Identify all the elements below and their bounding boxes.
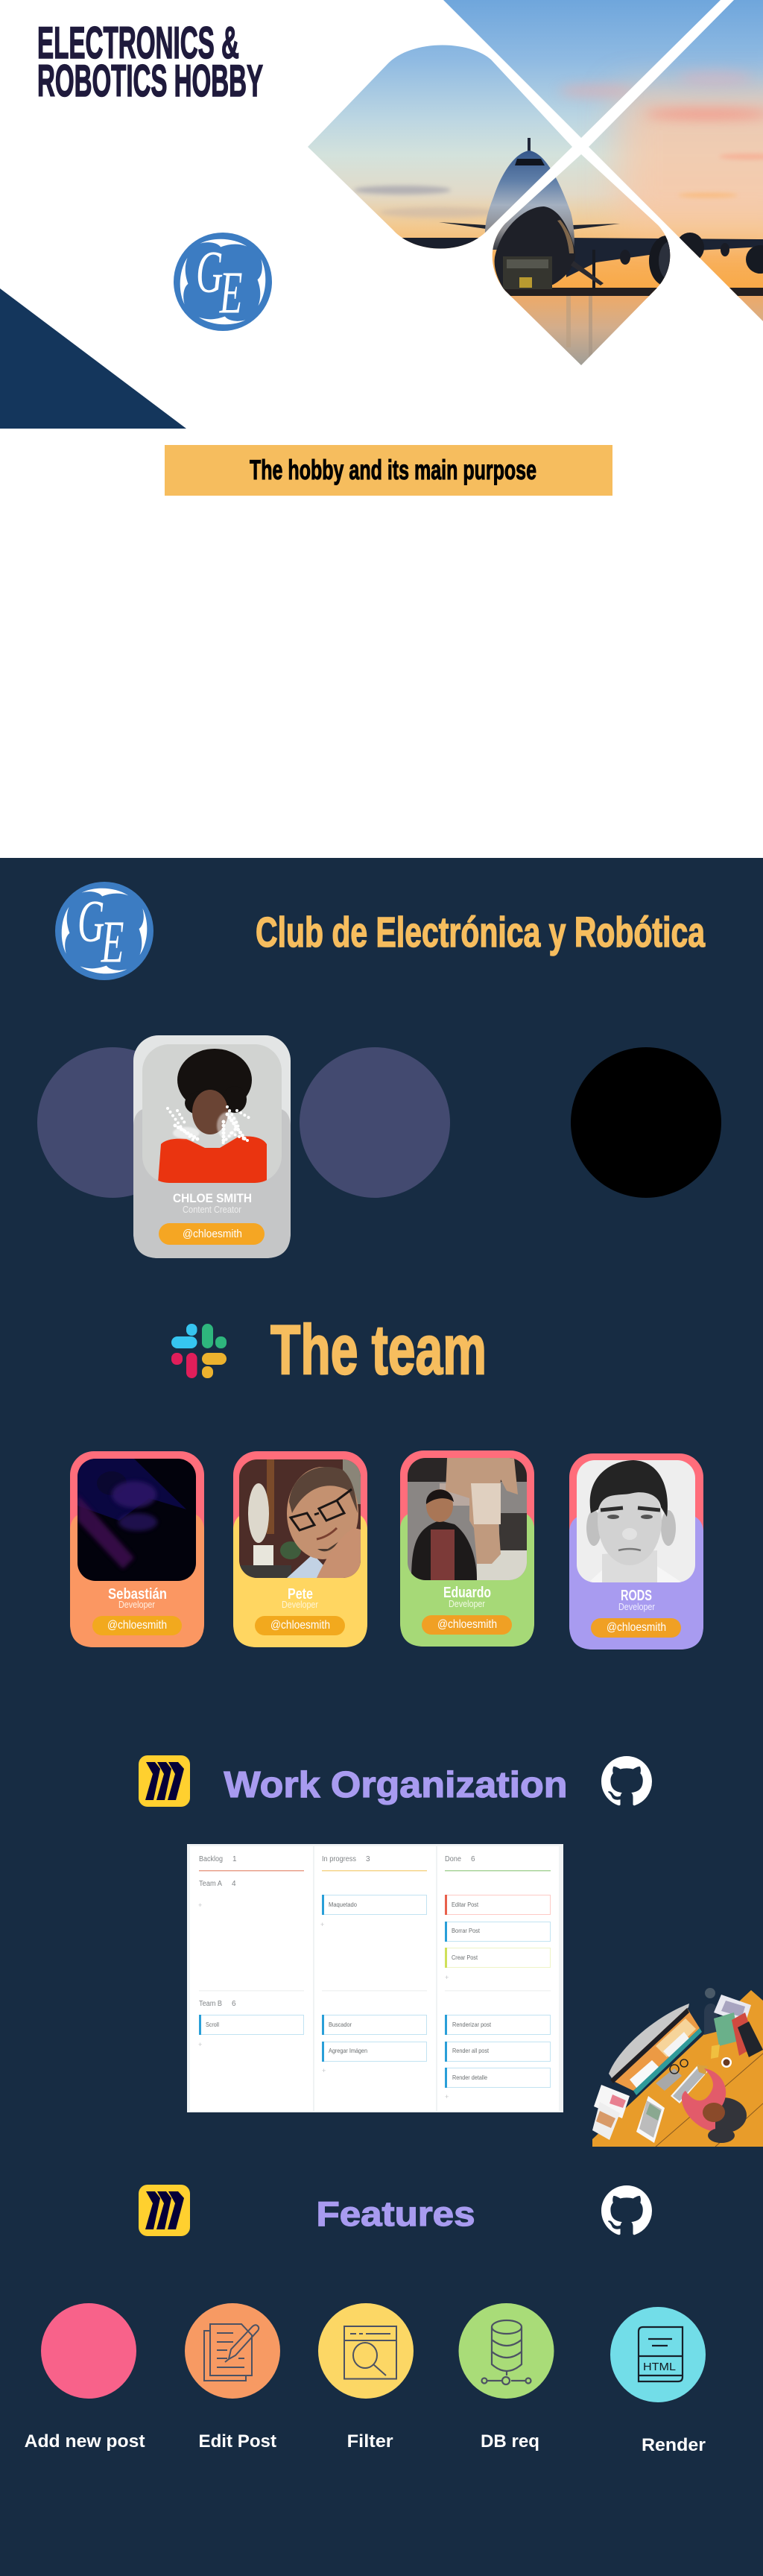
add markers: + [198, 1901, 202, 1909]
icon: github [601, 1756, 652, 1805]
name: RODS [621, 1588, 652, 1604]
heading: Features [316, 2194, 475, 2233]
task: Render all post: Render all post [452, 2047, 490, 2054]
tailplanes [439, 222, 620, 230]
notebook [636, 2096, 665, 2143]
handle pill: @chloesmith [437, 1618, 497, 1631]
team heading: The team [270, 1310, 487, 1389]
truck and landing gear [503, 256, 552, 289]
task cards [199, 1895, 550, 2088]
handle pill: @chloesmith [183, 1228, 242, 1240]
card: Eduardo [400, 1450, 534, 1647]
card: Pete [233, 1451, 367, 1647]
papers [592, 2085, 630, 2140]
handle pill: @chloesmith [607, 1621, 666, 1634]
column headers: In progress [322, 1855, 356, 1863]
circle middle [300, 1047, 450, 1198]
hero title: ELECTRONICS & [37, 18, 239, 68]
role: Developer [618, 1601, 656, 1612]
engines [649, 236, 671, 285]
feature: add new post [25, 2303, 145, 2452]
add markers: + [320, 1921, 324, 1928]
add markers [198, 1901, 449, 2100]
tail fin [528, 138, 531, 151]
heading: Work Organization [224, 1765, 568, 1805]
statue [446, 1458, 518, 1564]
horizon [484, 288, 763, 296]
column headers: Backlog [199, 1855, 223, 1863]
task: Agregar Imágen: Agregar Imágen [329, 2047, 367, 2054]
photo: RODS [577, 1460, 695, 1582]
subtitle banner: The hobby and its main purpose [250, 455, 536, 485]
man [411, 1521, 477, 1580]
column headers [199, 1855, 475, 2008]
feature: edit post: Edit Post [198, 2431, 276, 2452]
lamp [704, 1988, 719, 2035]
task: Editar Post [445, 1895, 550, 1915]
ge logo hero [174, 233, 272, 331]
panel: the team [70, 1310, 703, 1650]
column headers: 6 [471, 1855, 475, 1863]
task: Render all post [445, 2042, 550, 2062]
task: Crear Post: Crear Post [452, 1954, 478, 1961]
glasses [291, 1489, 352, 1530]
icon: html book: HTML [643, 2361, 676, 2373]
circle left [37, 1047, 188, 1198]
task: Maquetado [322, 1895, 426, 1915]
column headers: 4 [232, 1880, 236, 1888]
task: Crear Post [445, 1948, 550, 1968]
icon: search window [344, 2326, 396, 2379]
navy corner triangle [0, 288, 186, 429]
icon: miro [139, 2185, 190, 2236]
add markers: + [445, 2093, 449, 2100]
panel: hero [0, 0, 763, 496]
hero airplane photo collage [298, 0, 763, 370]
mug [721, 2057, 732, 2068]
role: Developer [449, 1598, 486, 1609]
task: Buscador [322, 2015, 426, 2035]
panel: features [25, 2185, 706, 2455]
panel: circles and featured card [37, 1035, 721, 1258]
task: Buscador: Buscador [329, 2021, 352, 2028]
name: CHLOE SMITH [173, 1191, 252, 1205]
column headers: 3 [366, 1855, 370, 1863]
photo: Pete [239, 1459, 361, 1578]
hero title [37, 18, 263, 106]
handle pill [255, 1616, 345, 1635]
ge logo hero: E [219, 259, 242, 326]
photo: Sebastián [77, 1459, 196, 1581]
handle pill [591, 1618, 681, 1638]
fuselage [485, 151, 574, 250]
hero title: ROBOTICS HOBBY [37, 56, 263, 106]
ge logo hero: G [196, 239, 223, 306]
panel: club header [55, 882, 706, 980]
feature: add new post: Add new post [25, 2431, 145, 2452]
task: Editar Post: Editar Post [452, 1901, 479, 1908]
role: Developer [282, 1599, 319, 1610]
task: Renderizar post [445, 2015, 550, 2035]
phone [711, 2045, 720, 2059]
navy background panel [0, 858, 763, 2576]
icon: database [481, 2320, 531, 2384]
card: RODS [569, 1453, 703, 1650]
illustration: desk top view [592, 1988, 763, 2147]
keyboard [671, 2065, 708, 2103]
panel: work organization [139, 1755, 763, 2147]
card: Chloe Smith [133, 1035, 291, 1258]
add markers: + [322, 2067, 326, 2074]
wings [402, 238, 478, 249]
name: Sebastián [108, 1586, 167, 1603]
task: Renderizar post: Renderizar post [452, 2021, 492, 2028]
task: Borrar Post: Borrar Post [452, 1927, 481, 1934]
feature: render [610, 2307, 706, 2455]
monitor [609, 2004, 702, 2095]
name: Pete [288, 1586, 313, 1603]
handle pill [422, 1615, 512, 1635]
person [682, 2068, 747, 2143]
feature: filter [318, 2303, 414, 2452]
water reflection [510, 295, 763, 365]
name: Eduardo [443, 1585, 491, 1601]
task: Agregar Imágen [322, 2042, 426, 2062]
handle pill: @chloesmith [270, 1619, 330, 1632]
column headers: Team B [199, 2000, 222, 2008]
ge logo club [55, 882, 153, 980]
photo: Eduardo [408, 1458, 527, 1580]
dark nose [495, 206, 575, 289]
task: Render detalle: Render detalle [452, 2074, 487, 2081]
column underlines [199, 1870, 551, 1992]
task: Scroll: Scroll [206, 2021, 219, 2028]
kanban board [187, 1844, 563, 2112]
feature: edit post [185, 2303, 280, 2452]
icon: html book [639, 2327, 683, 2381]
column headers: 6 [232, 2000, 236, 2008]
photo: Chloe [142, 1044, 282, 1183]
role: Developer [118, 1599, 156, 1610]
handle pill: @chloesmith [107, 1619, 167, 1632]
feature: filter: Filter [347, 2431, 393, 2452]
handle pill [159, 1223, 265, 1245]
subtitle banner [165, 445, 612, 496]
column headers: 1 [232, 1855, 237, 1863]
circle black [571, 1047, 721, 1198]
card: Sebastián [70, 1451, 204, 1647]
icon: miro [139, 1755, 190, 1807]
icon: github [601, 2185, 652, 2235]
add markers: + [198, 2041, 202, 2048]
books [714, 1995, 763, 2057]
feature: render: Render [642, 2435, 706, 2455]
column headers: Done [445, 1855, 461, 1863]
icon: slack [171, 1324, 227, 1378]
ge logo club: G [77, 888, 104, 955]
feature: db req [459, 2303, 554, 2452]
task: Scroll [199, 2015, 304, 2035]
glasses [670, 2059, 688, 2074]
add markers: + [445, 1974, 449, 1981]
column headers: Team A [199, 1880, 222, 1888]
task: Maquetado: Maquetado [329, 1901, 357, 1908]
ge logo club: E [101, 908, 124, 975]
task: Render detalle [445, 2068, 550, 2088]
feature: db req: DB req [481, 2431, 539, 2452]
handle pill [92, 1616, 182, 1635]
role: Content Creator [183, 1204, 242, 1215]
icon: document and pencil [204, 2324, 259, 2381]
task: Borrar Post [445, 1922, 550, 1942]
